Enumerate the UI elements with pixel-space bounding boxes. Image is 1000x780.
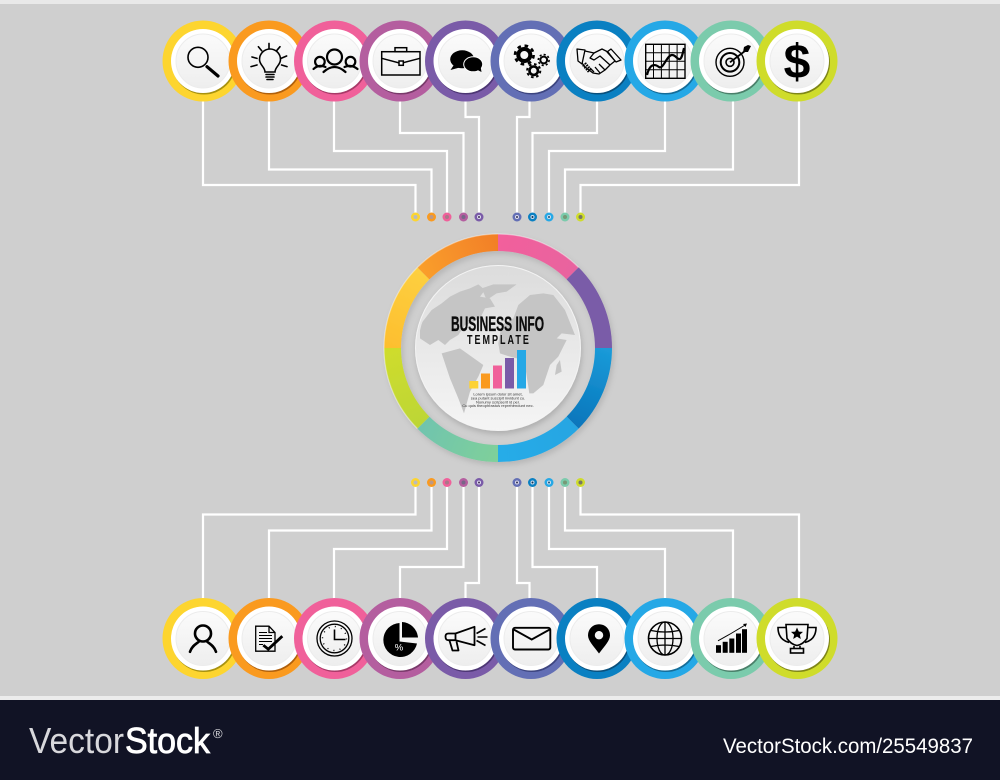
bottom button 4: pie chart xyxy=(360,598,440,679)
central disc xyxy=(416,266,580,430)
bottom light band xyxy=(0,696,1000,700)
bottom button 1: user xyxy=(162,598,244,679)
footer logo xyxy=(29,720,223,761)
central colour ring xyxy=(384,234,612,462)
top button 8: growth chart xyxy=(624,20,706,102)
top button 10: dollar xyxy=(756,20,838,102)
icon: dartboard with arrow xyxy=(716,45,751,76)
footer logo: Stock xyxy=(125,720,211,761)
icon: globe xyxy=(648,622,682,655)
icon: speech bubbles xyxy=(450,50,483,72)
top button 1: search xyxy=(162,20,244,102)
top button 9: target xyxy=(690,20,772,102)
footer logo: ® xyxy=(213,726,223,741)
bottom button 7: location pin xyxy=(556,598,638,679)
top light band xyxy=(0,0,1000,4)
title: BUSINESS INFO xyxy=(451,313,544,336)
icon: briefcase xyxy=(382,48,420,75)
bottom connector dots xyxy=(411,478,585,487)
bottom button 10: trophy xyxy=(756,598,838,679)
top button 7: handshake xyxy=(556,20,638,102)
footer logo: Vector xyxy=(29,720,124,761)
top button 5: chat xyxy=(425,20,506,102)
footer image id: VectorStock.com/25549837 xyxy=(723,735,973,758)
subtitle: TEMPLATE xyxy=(467,334,529,347)
icon: handshake xyxy=(577,49,621,74)
icon: document with check xyxy=(256,626,282,651)
body text: Lorem ipsum dolor sit amet, xyxy=(473,392,523,396)
icon: location pin xyxy=(588,624,610,654)
icon: pie chart with percent: % xyxy=(395,642,404,654)
bottom button 8: globe xyxy=(624,598,706,679)
world map xyxy=(420,284,575,413)
top button 3: team xyxy=(294,20,375,102)
top button 4: briefcase xyxy=(360,20,440,102)
icon: light bulb xyxy=(251,43,287,80)
icon: line chart on grid xyxy=(646,44,685,78)
icon: clock xyxy=(317,621,352,656)
bottom connector lines xyxy=(203,485,799,600)
bottom button 6: envelope xyxy=(490,598,572,679)
top connector lines xyxy=(203,100,799,214)
top button 6: settings xyxy=(490,20,572,102)
body text: Cu quis theophrastus reprehendunt nec. xyxy=(462,403,534,408)
bottom button 9: rising bars xyxy=(690,598,772,679)
icon: magnifier xyxy=(188,47,218,76)
icon: megaphone xyxy=(446,627,488,650)
body text: Nonumy scripserit id per. xyxy=(476,400,520,404)
icon: gears xyxy=(515,46,549,77)
icon: group of people xyxy=(314,50,358,72)
icon: trophy xyxy=(778,624,816,653)
icon: envelope xyxy=(513,628,550,650)
body text: sea putant suscipit invidunt cu. xyxy=(471,396,525,401)
bottom button 5: megaphone xyxy=(425,598,506,679)
mini bar chart xyxy=(469,350,526,388)
bottom button 3: clock xyxy=(294,598,375,679)
icon: user xyxy=(190,626,216,652)
top button 2: idea xyxy=(228,20,310,102)
icon: bars with arrow xyxy=(716,624,747,653)
top connector dots xyxy=(411,212,585,222)
icon: dollar sign: $ xyxy=(784,36,811,89)
bottom button 2: document xyxy=(228,598,310,679)
body text xyxy=(462,392,534,408)
footer bar xyxy=(0,700,1000,780)
